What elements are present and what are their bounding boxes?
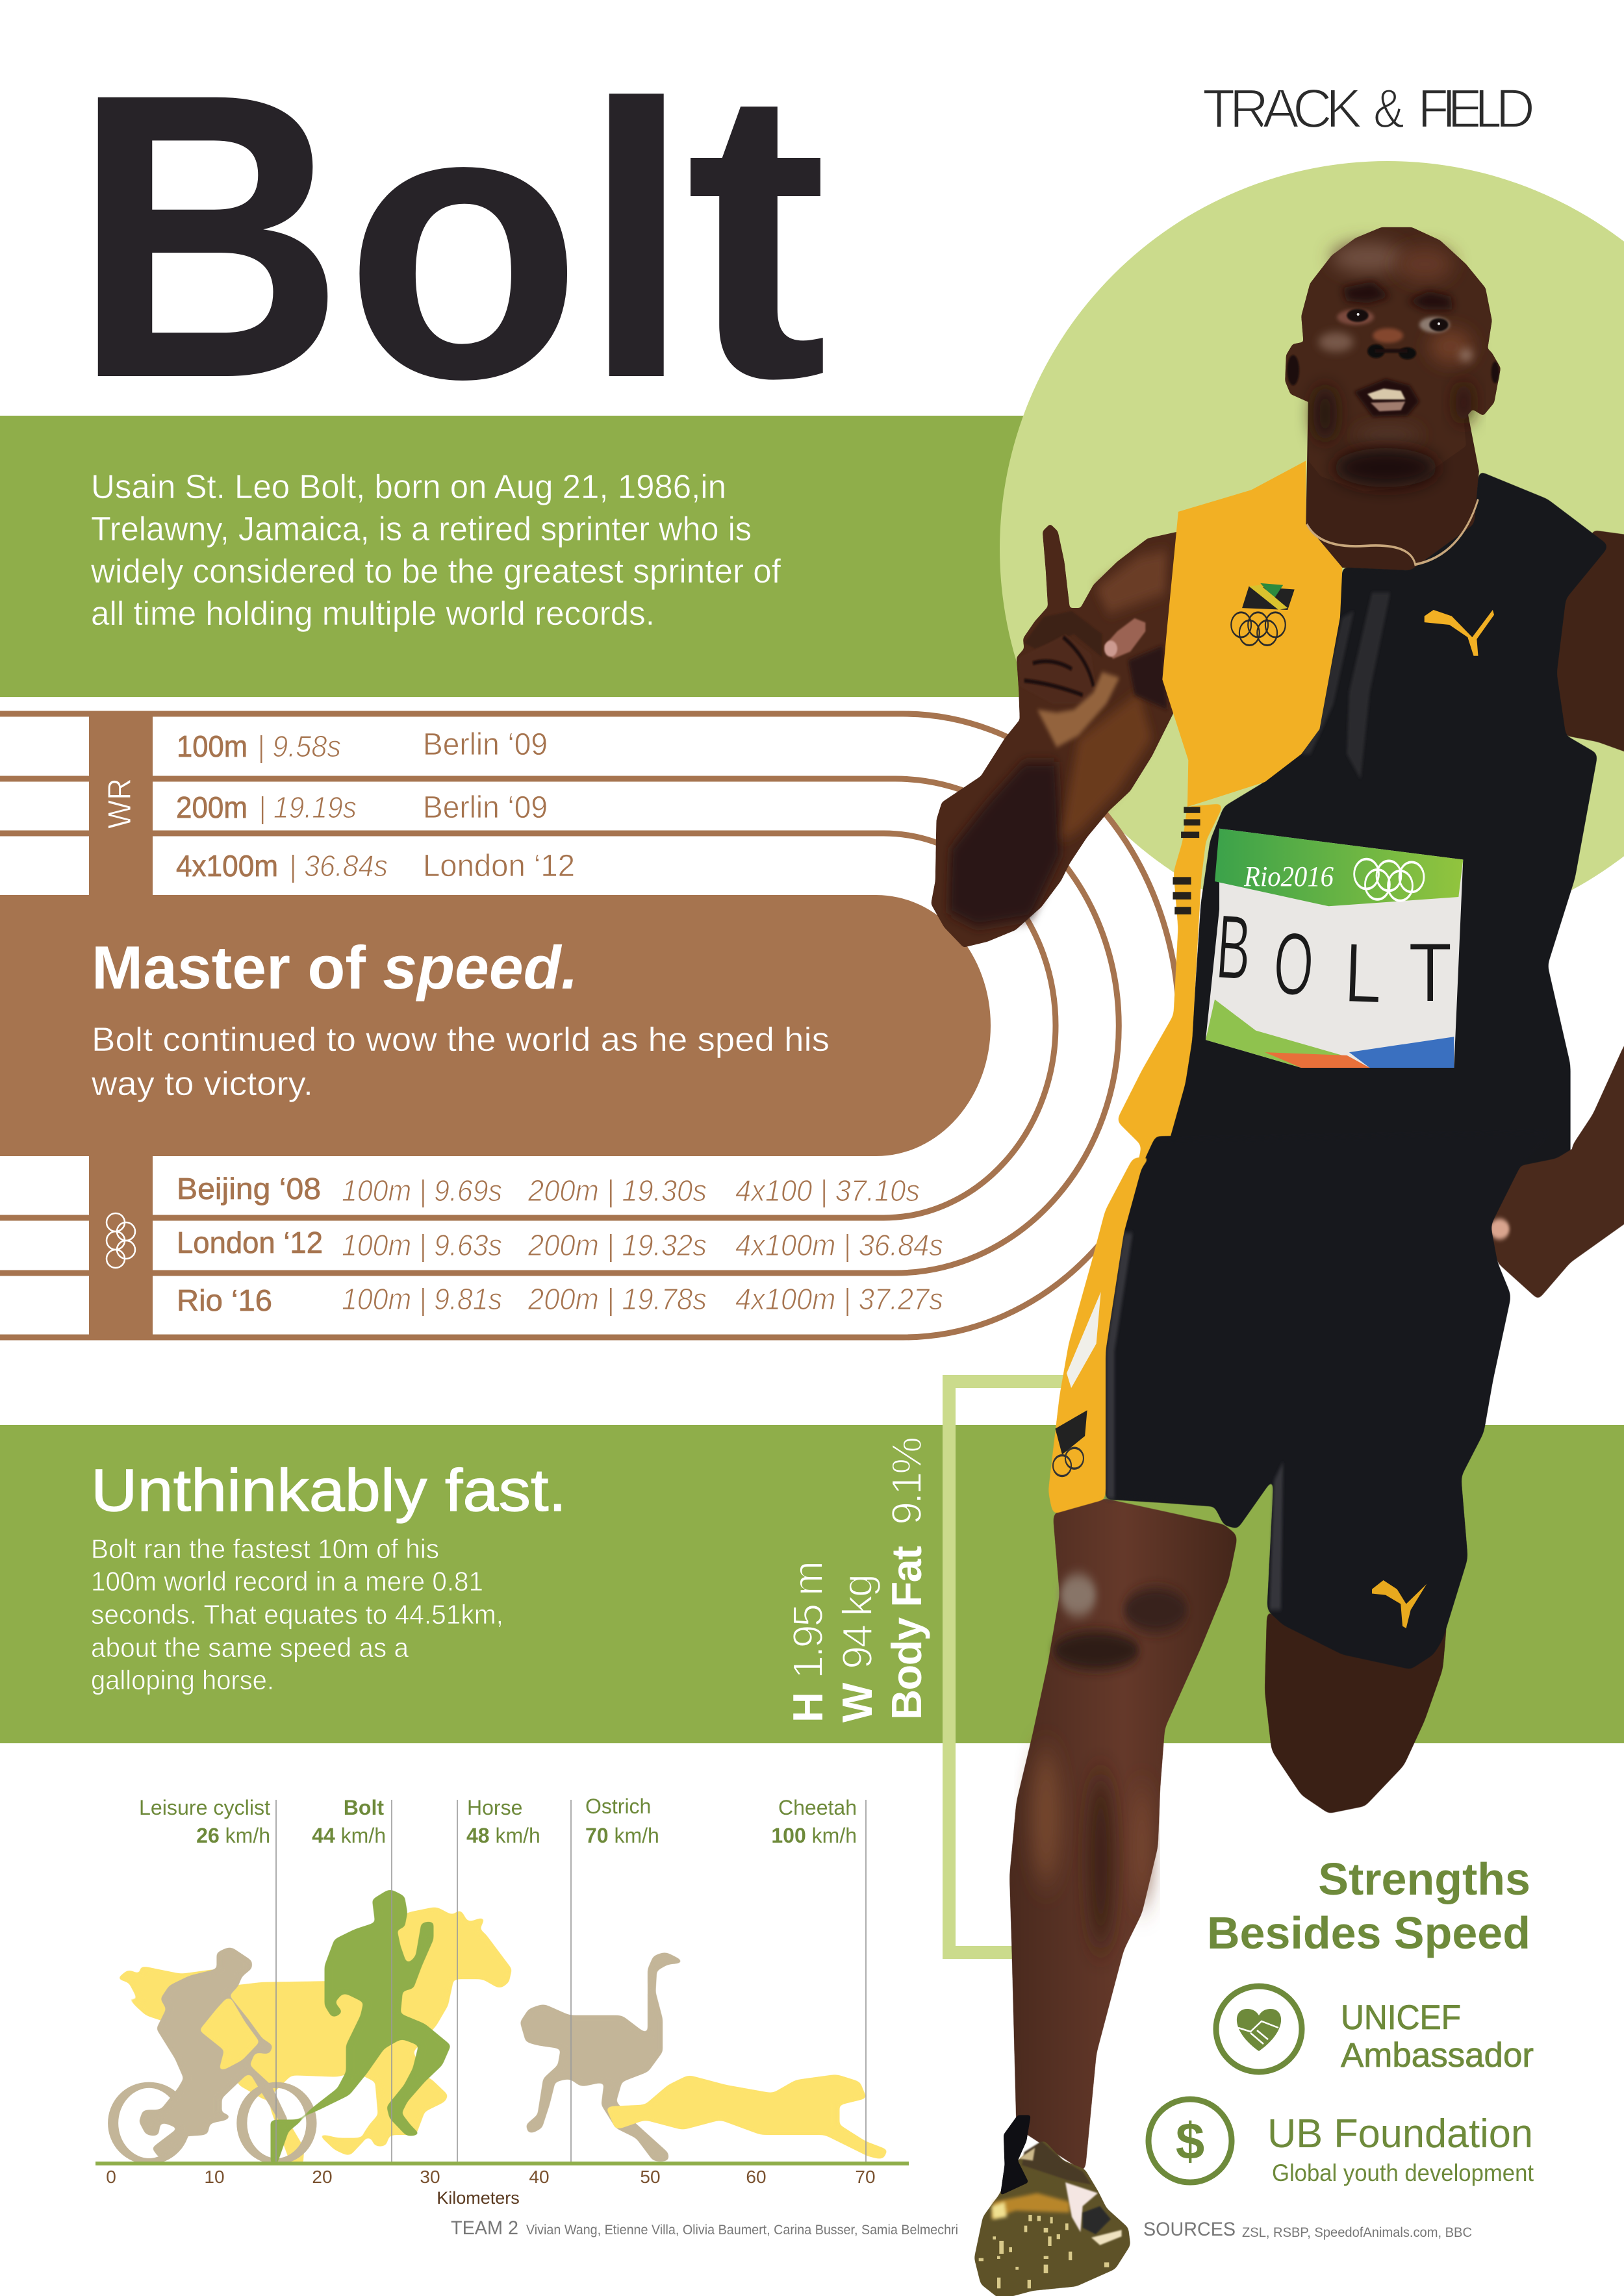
olympic results table: Beijing ‘08: [177, 1172, 321, 1205]
light green circle behind runner: [1000, 161, 1624, 937]
world record table: | 36.84s: [289, 849, 388, 883]
text: master of speed body: [91, 1021, 830, 1103]
axis numbers: 60: [746, 2167, 767, 2187]
heading: strengths: Strengths: [1318, 1854, 1530, 1904]
title: o: [344, 25, 583, 460]
text: unthinkably fast body: seconds. That equates to 44.51km,: [91, 1599, 503, 1630]
world record table: 4x100m: [176, 849, 278, 883]
heading: unthinkably fast: Unthinkably fast.: [91, 1457, 566, 1524]
credits: sources: SOURCES: [1143, 2219, 1236, 2240]
body stats: Body Fat: [883, 1546, 930, 1720]
olympic results table: London ‘12: [177, 1226, 323, 1259]
running track lanes: [0, 714, 1179, 1337]
olympic results table: 4x100m | 36.84s: [735, 1228, 943, 1262]
credits: sources: [1143, 2219, 1472, 2240]
bib text: BOLT: [1213, 896, 1452, 1021]
olympic results table: 200m | 19.32s: [527, 1228, 707, 1262]
bib text: BOLT: L: [1343, 925, 1384, 1021]
heading: strengths: Besides Speed: [1207, 1908, 1530, 1958]
fingers: [1024, 611, 1102, 657]
subtitle: track and field: [1202, 78, 1535, 139]
yellow shorts stripe: [1048, 1155, 1156, 1514]
olympic results table: 100m | 9.81s: [342, 1282, 502, 1316]
body stats: W: [833, 1682, 881, 1722]
silhouette: Bolt runner: [271, 1889, 451, 2165]
upper body: [1306, 400, 1624, 1202]
bib text: BOLT: T: [1408, 926, 1452, 1020]
olympic results table: 100m | 9.69s: [342, 1174, 502, 1207]
subtitle: track and field: &: [1373, 78, 1404, 139]
nose: [1373, 328, 1403, 343]
runner: Usain Bolt: [931, 227, 1624, 2296]
text: UB Foundation: [1267, 2112, 1534, 2186]
text: UB Foundation: Global youth development: [1272, 2160, 1534, 2186]
jersey flag and rings: [1231, 583, 1295, 646]
credits: sources: ZSL, RSBP, SpeedofAnimals.com, BBC: [1242, 2225, 1472, 2240]
subtitle: track and field: TRACK: [1202, 78, 1362, 139]
torso: [1117, 460, 1609, 1189]
bib text: Rio2016: Rio2016: [1243, 861, 1334, 892]
olympic results table: 4x100 | 37.10s: [735, 1174, 920, 1207]
body stats: 9.1%: [883, 1437, 930, 1525]
thumb: [1104, 618, 1145, 659]
olympic results table: 4x100m | 37.27s: [735, 1282, 943, 1316]
olympic results table: 100m | 9.63s: [342, 1228, 502, 1262]
axis numbers: 0: [106, 2167, 116, 2187]
speed labels: Ostrich: [585, 1795, 651, 1818]
intro text: all time holding multiple world records.: [91, 595, 655, 633]
credits: team: TEAM 2: [451, 2217, 518, 2239]
race bib: [1206, 829, 1463, 1068]
panel: master of speed: [0, 895, 991, 1156]
text: unthinkably fast body: about the same speed as a: [91, 1632, 409, 1663]
title: [73, 3, 828, 464]
axis numbers: 30: [420, 2167, 440, 2187]
olympic results table: [177, 1172, 943, 1317]
eyebrows: [1343, 281, 1390, 303]
silhouette: ostrich: [520, 1952, 683, 2162]
intro text: Trelawny, Jamaica, is a retired sprinter who is: [91, 511, 752, 548]
speed markers: [276, 1800, 866, 2164]
shoe: [974, 2115, 1130, 2296]
intro text: Usain St. Leo Bolt, born on Aug 21, 1986,in: [91, 468, 726, 506]
icon: heart handshake: [1216, 1986, 1302, 2072]
panel: unthinkably fast band: [0, 1425, 1624, 1743]
world record table: | 9.58s: [257, 729, 341, 763]
text: unthinkably fast body: 100m world record in a mere 0.81: [91, 1566, 483, 1596]
olympic results table: 200m | 19.78s: [527, 1282, 707, 1316]
text: UNICEF ambassador: [1341, 1999, 1534, 2075]
intro text: widely considered to be the greatest sprinter of: [90, 553, 781, 590]
speed labels: Horse: [467, 1796, 522, 1819]
vertical track column: [89, 711, 153, 1340]
credits: team: [451, 2217, 958, 2239]
text: unthinkably fast body: Bolt ran the fastest 10m of his: [91, 1533, 439, 1564]
pointing arm and hand: [931, 524, 1180, 948]
chart: speed comparison: [95, 1795, 909, 2208]
axis numbers: [106, 2167, 876, 2187]
lower body: [1009, 1107, 1624, 2172]
axis numbers: 40: [529, 2167, 550, 2187]
black jersey: [1151, 472, 1609, 1189]
eyes: [1337, 309, 1374, 325]
title: l: [581, 23, 692, 459]
body stats: 94 kg: [833, 1574, 881, 1669]
body stats: H: [784, 1692, 831, 1722]
speed labels: Cheetah: [778, 1796, 857, 1819]
heading: strengths: [1207, 1854, 1530, 1958]
black shorts: [1106, 1129, 1556, 1669]
ground axis: [95, 2162, 909, 2165]
shorts puma logo: [1372, 1580, 1427, 1628]
world record table: London ‘12: [423, 849, 575, 883]
silhouettes: [113, 1889, 887, 2165]
axis label: Kilometers: [437, 2188, 520, 2208]
speed labels: 26 km/h: [196, 1824, 270, 1847]
olympic results table: Rio ‘16: [177, 1283, 272, 1317]
hand: [1490, 1107, 1624, 1299]
neck: [1306, 400, 1479, 571]
body stats: [784, 1437, 930, 1722]
heading: master of speed: Master of speed.: [92, 933, 578, 1002]
text: unthinkably fast body: [91, 1533, 503, 1695]
raised leg: [1265, 1610, 1447, 1813]
world record table: Berlin ‘09: [423, 727, 548, 762]
speed labels: 100 km/h: [771, 1824, 857, 1847]
world record table: [176, 727, 575, 883]
body stats: 1.95 m: [784, 1561, 831, 1679]
silhouette: cyclist: [113, 1947, 311, 2162]
title: B: [73, 9, 345, 462]
speed labels: [139, 1795, 857, 1847]
text: master of speed body: Bolt continued to wow the world as he sped his: [92, 1021, 830, 1059]
icon: dollar: [1148, 2099, 1232, 2182]
axis numbers: 50: [640, 2167, 661, 2187]
intro text: [90, 468, 781, 633]
world record table: 100m: [177, 729, 247, 763]
title: t: [685, 3, 828, 464]
speed labels: 44 km/h: [312, 1824, 386, 1847]
speed labels: 48 km/h: [466, 1824, 540, 1847]
silhouette: cheetah: [607, 2075, 887, 2160]
speed labels: 70 km/h: [585, 1824, 659, 1847]
necklace: [1307, 499, 1478, 564]
text: UB Foundation: UB Foundation: [1267, 2112, 1533, 2156]
speed labels: Leisure cyclist: [139, 1796, 270, 1819]
head: [1285, 227, 1501, 492]
mouth: [1354, 379, 1419, 417]
panel: introduction band: [0, 416, 1052, 697]
light green bracket: [949, 1381, 1072, 1952]
icon: dollar: $: [1176, 2112, 1204, 2170]
palm: [1037, 672, 1119, 748]
panel: strengths besides speed: [1148, 1854, 1534, 2186]
axis numbers: 10: [204, 2167, 225, 2187]
axis numbers: 70: [855, 2167, 876, 2187]
speed labels: Bolt: [344, 1796, 384, 1819]
icon: olympic rings: [107, 1213, 135, 1268]
front leg: [1009, 1499, 1237, 2172]
subtitle: track and field: FIELD: [1417, 78, 1535, 139]
world record table: Berlin ‘09: [423, 790, 548, 825]
axis numbers: 20: [312, 2167, 333, 2187]
bib text: BOLT: O: [1271, 913, 1317, 1015]
world record table: | 19.19s: [259, 790, 357, 824]
yellow jersey panel: [1162, 460, 1342, 807]
text: master of speed body: way to victory.: [91, 1065, 313, 1103]
olympic results table: 200m | 19.30s: [527, 1174, 707, 1207]
jersey puma logo: [1425, 610, 1494, 656]
world record table: 200m: [176, 790, 247, 824]
silhouette: horse: [117, 1907, 512, 2165]
text: UNICEF ambassador: UNICEF: [1341, 1999, 1461, 2037]
text: UNICEF ambassador: Ambassador: [1341, 2036, 1534, 2075]
credits: team: Vivian Wang, Etienne Villa, Olivia Baumert, Carina Busser, Samia Belmechri: [526, 2223, 958, 2238]
text: unthinkably fast body: galloping horse.: [91, 1665, 274, 1695]
label: WR: WR: [101, 778, 138, 829]
right arm: [1547, 531, 1624, 773]
bib text: BOLT: B: [1213, 896, 1254, 1000]
ears: [1287, 355, 1299, 385]
